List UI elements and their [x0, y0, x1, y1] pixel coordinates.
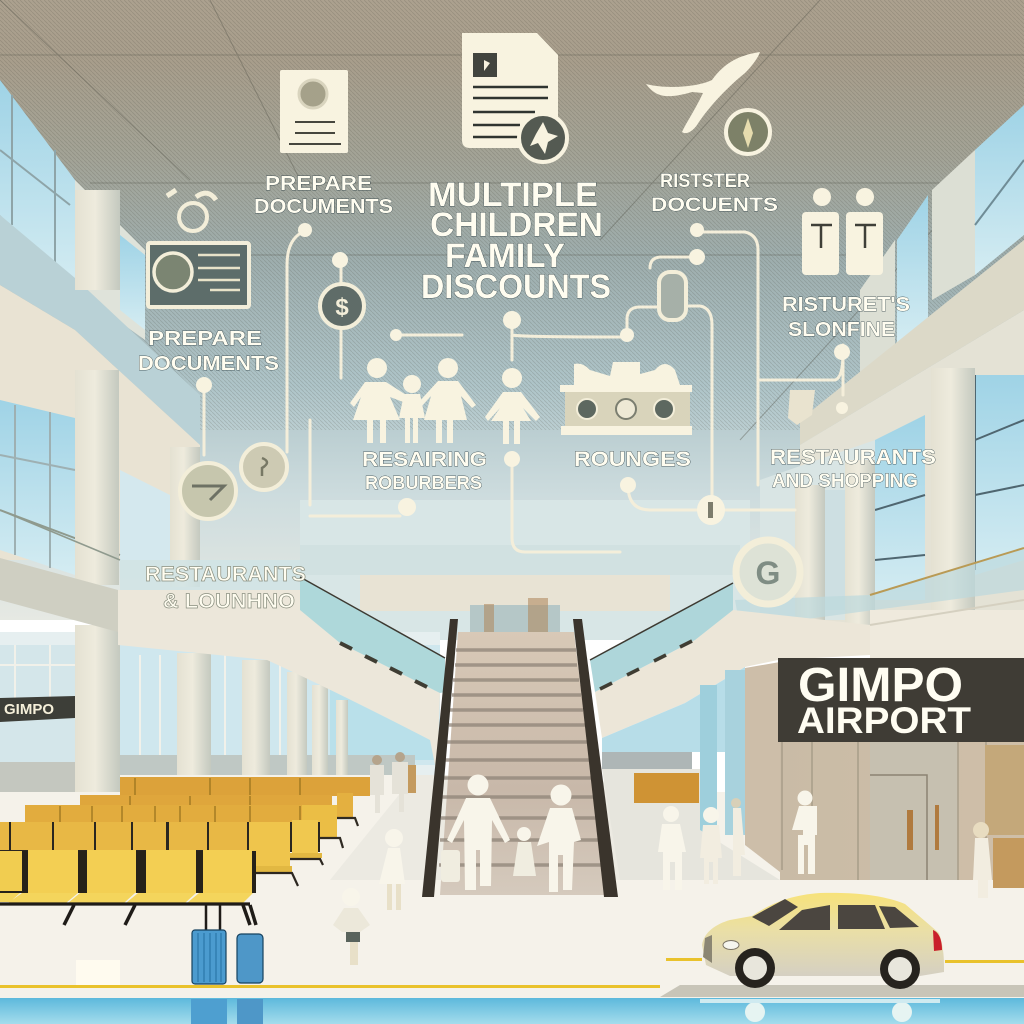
- heading: Multiple Children Family Discounts: DISCOUNTS: [421, 268, 611, 306]
- icon: large document with seal: [462, 33, 567, 162]
- icon: dollar badge: $: [335, 294, 349, 321]
- father figure: [447, 774, 510, 890]
- label: prepare documents top: [254, 173, 393, 218]
- yellow floor lines: [0, 958, 1024, 988]
- small sign: GIMPO: [4, 701, 54, 718]
- label: register documents: RISTSTER: [660, 171, 750, 192]
- label: prepare documents top: PREPARE: [265, 173, 372, 195]
- icon: payment card: [148, 243, 249, 307]
- icon: airplane: [646, 52, 770, 154]
- label: resairing roburbers: ROBURBERS: [365, 473, 482, 493]
- child figure: [513, 827, 536, 876]
- icon: child figure: [485, 368, 540, 444]
- middle seat row: [0, 820, 323, 886]
- heading: Multiple Children Family Discounts: CHILDREN: [430, 206, 603, 244]
- traveller child foreground: [333, 888, 370, 965]
- icon: left small badge: [241, 444, 287, 490]
- flow connectors: [204, 231, 843, 552]
- lower left hall with windows: [0, 632, 440, 794]
- sign: Gimpo Airport: AIRPORT: [797, 700, 971, 741]
- icon: connector node: [697, 495, 725, 525]
- icon: document with stamp: [280, 70, 348, 153]
- mother figure: [537, 784, 581, 892]
- back seat rows: [25, 777, 370, 848]
- label: restaurants and slonfine: [782, 294, 910, 341]
- label: restaurants and slonfine: SLONFINE: [788, 319, 895, 341]
- balcony balustrades: [0, 510, 1024, 632]
- label: rounges: ROUNGES: [574, 448, 691, 471]
- label: restaurants and shopping: [770, 446, 936, 492]
- icon: dollar badge: [320, 284, 364, 328]
- label: prepare documents left: PREPARE: [148, 328, 262, 350]
- label: resairing roburbers: RESAIRING: [362, 449, 487, 471]
- suitcase: [441, 850, 460, 882]
- label: restaurants and lounges: [145, 563, 306, 613]
- label: restaurants and shopping: AND SHOPPING: [772, 471, 918, 492]
- right wall with windows: [760, 105, 1024, 640]
- icon: lounge building: [560, 362, 692, 435]
- label: register documents: DOCUENTS: [651, 195, 778, 216]
- central staircase: [422, 619, 618, 897]
- family on stairs: [441, 774, 581, 892]
- label: restaurants and shopping: RESTAURANTS: [770, 446, 936, 469]
- label: restaurants and lounges: RESTAURANTS: [145, 563, 306, 586]
- sign: Gimpo Airport: [778, 658, 1024, 742]
- label: restaurants and lounges: & LOUNHNO: [163, 590, 295, 613]
- left side staircase: [118, 577, 445, 775]
- back hall mezzanine: [300, 500, 750, 640]
- left wall with windows: [0, 80, 200, 575]
- background travellers: [370, 752, 416, 813]
- label: resairing roburbers: [362, 449, 487, 493]
- label: restaurants and slonfine: RISTURET'S: [782, 294, 910, 316]
- reflective water strip: [0, 998, 1024, 1024]
- icon: tag: [659, 272, 686, 320]
- ceiling: [0, 0, 1024, 620]
- sign: Gimpo Airport: GIMPO: [798, 659, 963, 712]
- label: register documents: [651, 171, 778, 216]
- under-stair area right: [602, 667, 780, 880]
- label: prepare documents left: DOCUMENTS: [138, 353, 279, 375]
- front seat row: [0, 850, 256, 925]
- small sign: [0, 696, 75, 722]
- icon: shopping bag: [788, 390, 848, 425]
- icon: spiral medallion: G: [756, 555, 780, 591]
- floor: [0, 775, 1024, 1000]
- icon: mug: [167, 190, 216, 231]
- right side staircase: [590, 583, 1024, 738]
- wheels: [735, 948, 920, 989]
- label: prepare documents left: [138, 328, 279, 375]
- icon: left circle badge: [180, 463, 236, 519]
- heading: Multiple Children Family Discounts: [421, 176, 611, 306]
- connector dots: [196, 223, 850, 516]
- icon: parents and child: [350, 358, 476, 443]
- store front: [745, 658, 1024, 888]
- heading: Multiple Children Family Discounts: MULTIPLE: [428, 176, 598, 214]
- luggage: plain blue: [237, 934, 263, 983]
- left railing: [422, 619, 458, 897]
- label: prepare documents top: DOCUMENTS: [254, 196, 393, 218]
- luggage: striped blue: [192, 905, 226, 984]
- people near store: [658, 790, 992, 898]
- taxi car: [702, 893, 944, 989]
- icon: two lounge panels: [802, 188, 883, 275]
- traveller child near seats: [379, 829, 405, 910]
- icon: spiral medallion: [736, 540, 800, 604]
- columns: [75, 190, 975, 796]
- heading: Multiple Children Family Discounts: FAMILY: [445, 237, 565, 275]
- right railing: [573, 619, 618, 897]
